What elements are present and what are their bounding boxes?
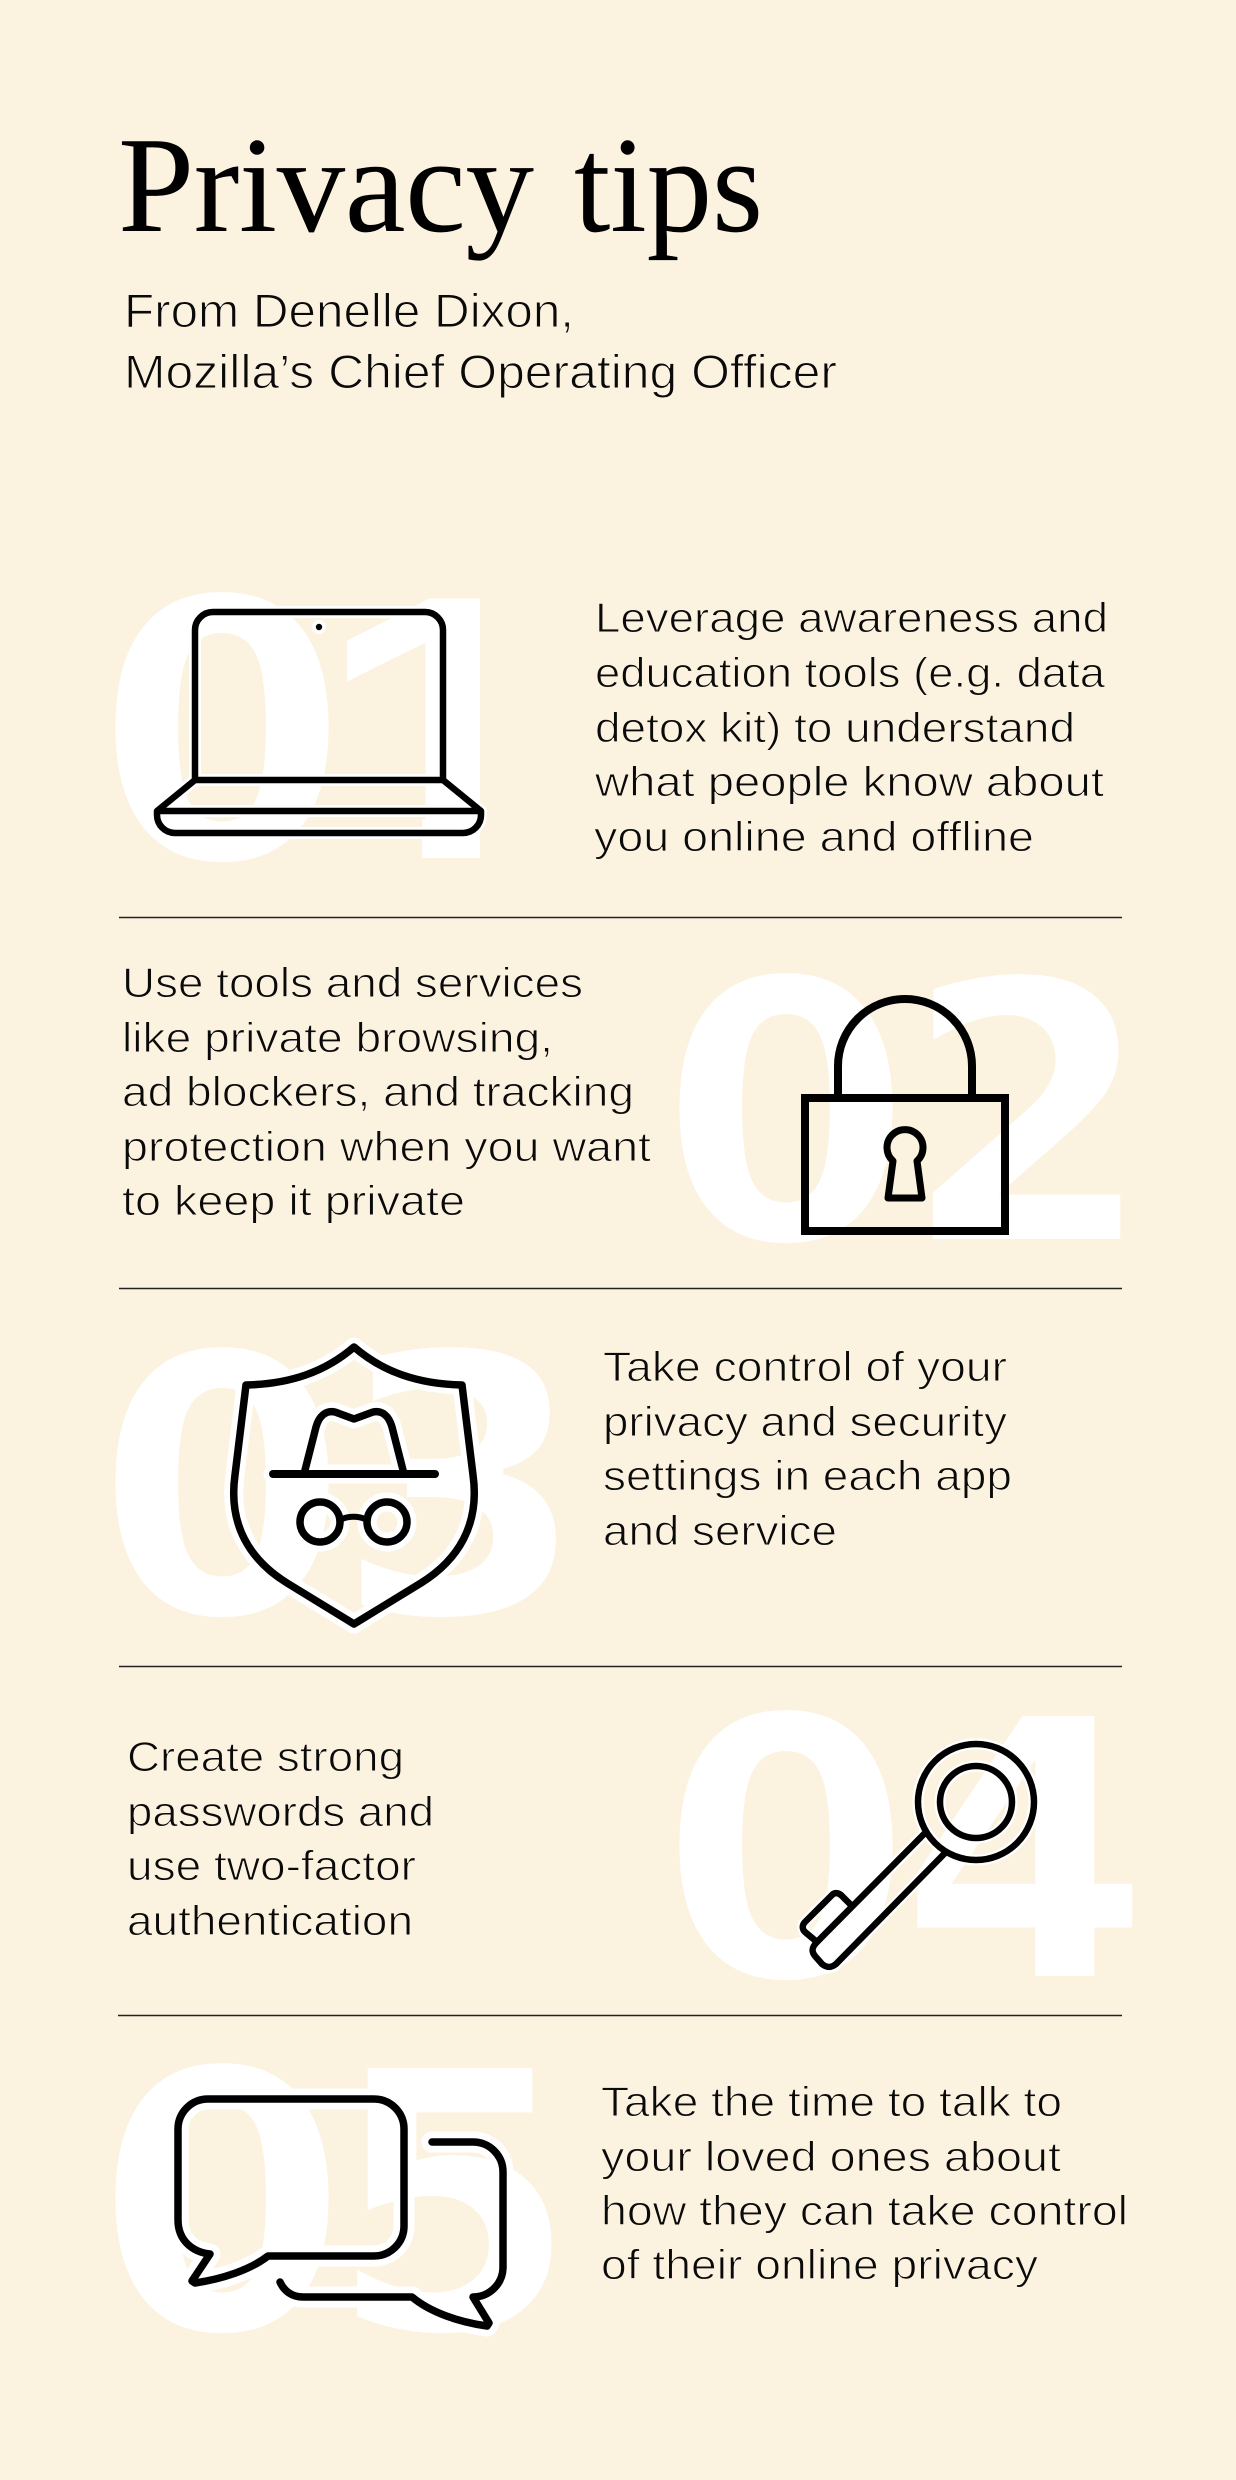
number 01: 0 — [95, 522, 349, 947]
number 03 — [95, 1277, 588, 1702]
number 02: 0 — [659, 903, 913, 1328]
tip 1 text: detox kit) to understand — [595, 704, 1075, 751]
number 01 — [116, 592, 480, 862]
tip 5 text: your loved ones about — [601, 2133, 1061, 2180]
tip 2 text: Use tools and services — [122, 959, 583, 1006]
tip 1 text: Leverage awareness and — [595, 594, 1108, 641]
title: tips — [574, 109, 763, 261]
number 04: 0 — [659, 1640, 913, 2065]
tip 3 text — [603, 1343, 1012, 1554]
number 02: 2 — [901, 904, 1155, 1329]
number 02 — [659, 903, 1155, 1329]
number 04: 4 — [898, 1641, 1152, 2066]
tip 5 text: Take the time to talk to — [601, 2078, 1062, 2125]
subtitle — [124, 284, 837, 398]
panel: tip 2 — [122, 903, 1155, 1329]
tip 2 text: like private browsing, — [122, 1014, 553, 1061]
tip 4 text: Create strong — [127, 1733, 404, 1780]
panel: tip 1 — [116, 592, 1104, 862]
panel: tip 3 — [95, 1277, 1012, 1702]
tip 4 text: passwords and — [127, 1788, 434, 1835]
number 05: 5 — [326, 1993, 580, 2418]
tip 5 text: of their online privacy — [601, 2241, 1038, 2288]
icon: speech bubbles — [178, 2099, 503, 2326]
tip 3 text: settings in each app — [603, 1452, 1012, 1499]
tip 3 text: and service — [603, 1507, 837, 1554]
tip 3 text: privacy and security — [603, 1398, 1007, 1445]
tip 4 text: authentication — [127, 1897, 413, 1944]
tip 4 text: use two-factor — [127, 1842, 416, 1889]
number 01: 1 — [314, 516, 579, 938]
tip 2 text — [122, 959, 651, 1224]
tip 1 text: what people know about — [594, 758, 1104, 805]
number 05 — [95, 1993, 580, 2418]
subtitle: Mozilla’s Chief Operating Officer — [124, 345, 837, 398]
infographic: privacy tips — [116, 140, 1132, 2336]
number 03: 3 — [334, 1277, 588, 1702]
tip 3 text: Take control of your — [603, 1343, 1007, 1390]
subtitle: From Denelle Dixon, — [124, 284, 574, 337]
icon: incognito shield — [234, 1347, 474, 1624]
tip 1 text — [594, 594, 1108, 860]
tip 2 text: protection when you want — [122, 1123, 651, 1170]
number 04 — [659, 1640, 1152, 2066]
tip 2 text: to keep it private — [122, 1177, 465, 1224]
tip 5 text — [601, 2078, 1128, 2288]
number 03: 0 — [95, 1277, 349, 1702]
title: Privacy — [118, 109, 534, 261]
tip 5 text: how they can take control — [601, 2187, 1128, 2234]
tip 1 text: you online and offline — [594, 813, 1034, 860]
tip 1 text: education tools (e.g. data — [595, 649, 1106, 696]
tip 4 text — [127, 1733, 434, 1944]
tip 2 text: ad blockers, and tracking — [122, 1068, 634, 1115]
title — [118, 109, 763, 261]
panel: tip 5 — [95, 1993, 1128, 2418]
number 05: 0 — [95, 1993, 349, 2418]
icon: key — [803, 1744, 1034, 1968]
icon: padlock — [805, 999, 1005, 1231]
panel: tip 4 — [127, 1640, 1152, 2066]
icon: laptop — [157, 612, 481, 833]
